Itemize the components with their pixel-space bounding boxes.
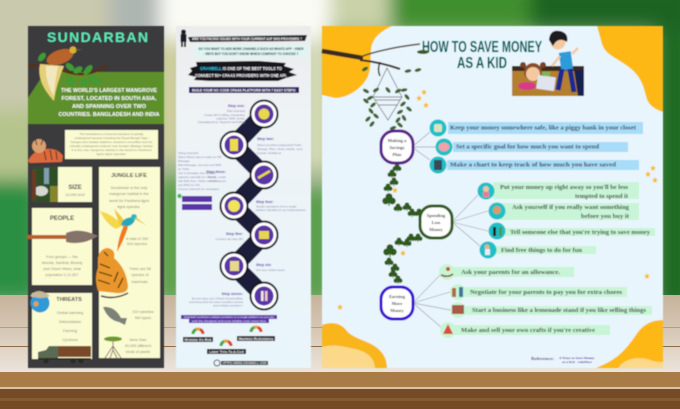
panel: people: PEOPLE <box>50 216 74 222</box>
text: channel list: Choose channels for campaigns <box>178 187 220 191</box>
panel: size <box>32 167 92 202</box>
panel: threats: Farming <box>63 329 77 333</box>
text: step six: Step six: <box>256 263 272 267</box>
branch items: earning more: Negotiate for your parents to pay you for extra chores <box>470 290 623 296</box>
branch items: spending less: tempted to spend it <box>575 194 628 200</box>
panel: jungle life: species of <box>131 273 149 277</box>
node: earning more money: More <box>392 301 402 306</box>
callout: channels question: DO YOU WANT TO ADD MORE CHANNELS SUCH AS WHATS APP - VIBER <box>198 47 304 51</box>
branch items: spending less: Ask yourself if you really want something <box>512 205 629 211</box>
reference note: 6 Ways to Save Money <box>560 356 595 360</box>
panel: jungle life <box>96 167 160 358</box>
panel: jungle life: 40,000 different <box>125 344 152 348</box>
title: how to save money as a kid <box>422 39 542 72</box>
illustration: kids with money box <box>512 31 584 96</box>
text: channel list: capacity manually for Consult <box>178 175 216 179</box>
green headline band <box>28 72 164 124</box>
node: making a savings plan: Making a <box>388 138 407 143</box>
text: step four <box>256 200 306 212</box>
node: spending less money <box>420 206 452 238</box>
panel: threats: Deforestation <box>59 320 81 324</box>
panel: Sundarban infographic <box>27 26 164 368</box>
green headline band: FOREST, LOCATED IN SOUTH ASIA, <box>62 96 157 102</box>
text: step two: Step two: <box>257 137 274 141</box>
text: channel list: and SMS for IVR <box>178 183 200 187</box>
title: how to save money as a kid: HOW TO SAVE MONEY <box>422 39 542 56</box>
text: step one: Step one: <box>228 104 245 108</box>
node: spending less money: Less <box>432 220 441 225</box>
icon: logging truck <box>38 346 91 364</box>
text: step seven: and multiple providers ! <box>213 304 243 308</box>
branch items: earning more: Start a business like a lemonade stand if you like selling things <box>472 308 647 314</box>
branch items: earning more: Make and sell your own crafts if you're creative <box>461 328 595 334</box>
icon: sitting tiger <box>96 248 128 297</box>
text: step six: Get your unified report <box>256 268 285 272</box>
text: step two: include: shoftapi.ai <box>257 151 281 155</box>
text: step three <box>206 170 226 183</box>
panel: jungle life: More than <box>129 338 147 342</box>
node: spending less money: Spending <box>427 213 446 218</box>
text: step three: flow in secon <box>209 179 226 183</box>
branch items: spending less <box>478 182 655 258</box>
green headline band: THE WORLD'S LARGEST MANGROVE <box>61 88 157 94</box>
panel: Grambell CPaaS infographic <box>176 26 311 368</box>
gauge: maximize redundancy: Maximize Redundancy <box>238 337 274 341</box>
text: step four: Simple operations from a single <box>256 204 297 208</box>
text: step six <box>256 263 285 272</box>
banner: build steps: BUILD YOUR NO CODE CPAAS PLATFORM WITH 7 EASY STEPS! <box>192 88 296 92</box>
panel: people: population 2,11,627 <box>45 273 79 277</box>
orange blob top right <box>597 26 663 112</box>
reference note: as a Kid - wikiHow <box>562 360 593 364</box>
panel: threats: THREATS <box>56 297 82 303</box>
decorative stars <box>337 89 658 310</box>
node: earning more money <box>381 287 413 319</box>
intro text box: endangered species including the Royal Bengal Tiger, <box>74 136 149 140</box>
text: step one: Campaign(sms), Segment and billing <box>198 120 245 124</box>
title: Sundarban: SUNDARBAN <box>47 29 148 45</box>
text: step one: segment, SMS, Email, <box>216 116 245 120</box>
purple summary band: pick the cheapest and most reliable route every time <box>192 319 266 323</box>
text: step seven: and bring back the same excellent service <box>189 300 243 304</box>
text: step three: Step three: <box>206 170 226 174</box>
icon: hummingbird <box>100 209 147 252</box>
panel: threats <box>30 291 92 364</box>
branch with hanging planter <box>322 44 429 131</box>
text: step five: Step five: <box>226 232 243 236</box>
footer url <box>214 360 268 366</box>
text: channel list: for Twilio <box>178 167 190 171</box>
intro text box <box>65 130 158 159</box>
node: spending less money: Money <box>429 227 443 232</box>
node: making a savings plan <box>381 131 413 163</box>
branch items: earning more <box>439 264 652 338</box>
forest image <box>32 167 58 202</box>
text: channel list: with Bulk Sms, Twitter and Viber <box>178 179 219 183</box>
gauge: minimize the risk: Minimize the Risk <box>184 338 212 342</box>
intro text box: This Sundarbans is of universal importance for globally <box>80 132 144 136</box>
green headline band: AND SPANNING OVER TWO <box>72 104 147 110</box>
panel: how to save money as a kid <box>322 26 663 368</box>
branch items: savings plan <box>430 120 643 174</box>
panel: jungle life: JUNGLE LIFE <box>111 173 147 179</box>
panel: jungle life: bird species <box>127 242 147 246</box>
banner: Grambell headline <box>188 61 297 81</box>
icon: globe <box>30 291 50 312</box>
text: step seven: Step seven: <box>222 292 243 296</box>
step circles <box>220 100 278 310</box>
text: channel list: Message <box>178 159 190 163</box>
banner: question: ARE YOU FACING ISSUES WITH YOUR CURRENT A2P SMS PROVIDERS ? <box>192 37 302 41</box>
panel: people: Four groups — the <box>46 255 78 259</box>
icon: bird of paradise on branch <box>28 46 108 101</box>
text: channel list: Select Meta's app to make an IVR <box>178 155 222 159</box>
branch items: earning more: Ask your parents for an allowance. <box>461 270 561 276</box>
text: step four: platform (Enable for our implementors) <box>256 208 306 212</box>
panel: jungle life: A total of 269 <box>126 237 148 241</box>
text: step seven <box>189 292 244 308</box>
text: step four: Step four: <box>256 200 274 204</box>
orange blob bottom left <box>322 323 387 368</box>
branch items: savings plan: Keep your money somewhere safe, like a piggy bank in your closet <box>450 126 636 132</box>
panel: jungle life: 210 varieties <box>132 310 154 314</box>
green headline band: COUNTRIES. BANGLADESH AND INDIA <box>58 112 160 118</box>
node: making a savings plan: Plan <box>393 152 402 157</box>
purple summary band <box>181 315 277 323</box>
branch items: savings plan: Set a specific goal for how much you want to spend <box>456 144 600 150</box>
text: step one: Pilot Grambell <box>227 109 245 113</box>
intro text box: tigris tigris species. <box>96 152 127 156</box>
callout: channels question: - RBTS BUT YOU DON'T KNOW WHICH COMPANY TO CHOOSE ? <box>204 52 298 56</box>
panel: size: 10,000 km2 <box>65 193 85 197</box>
node: making a savings plan: Savings <box>389 145 405 150</box>
text: step two: Select providers (supported) Twilio, <box>257 143 302 147</box>
callout: channels question <box>195 45 308 57</box>
icon: mangrove tree <box>104 336 122 358</box>
branch items: savings plan: Make a chart to keep track of how much you have saved <box>450 162 617 168</box>
title: how to save money as a kid: AS A KID <box>457 55 507 72</box>
orange blob bottom right <box>596 320 663 368</box>
icon: lying tiger <box>28 139 63 163</box>
footer url: HTTPS://WWW.GRAMBELL.COM <box>222 361 267 365</box>
text: channel list: Bulk Message: via a bot and SMS <box>178 163 221 167</box>
connector lines <box>412 132 488 328</box>
purple summary band: Grambell combines multiple providers on a single platform so you can <box>184 315 274 319</box>
gauge: maximize redundancy <box>237 327 275 341</box>
panel: threats: Cyclones <box>62 338 78 342</box>
gauge: lower time-to-cost: Lower Time-To-&-Cost <box>209 350 245 354</box>
panel: jungle life: kinds of plants <box>126 350 150 354</box>
text: step seven: Sit and enjoy your CPaaS functionalities <box>192 296 244 300</box>
icon: astronaut figure <box>180 30 186 47</box>
text: step five: Connect via easy API <box>216 237 243 241</box>
step path connector <box>234 114 264 296</box>
gauge: minimize the risk <box>183 329 213 342</box>
icon: spear brush <box>27 231 98 243</box>
node: earning more money: Money <box>390 308 404 313</box>
intro text box: Ganges and Irawadi dolphins, estuarine crocodiles and the <box>70 140 153 144</box>
panel: jungle life: world for Panthera tigris <box>109 199 149 203</box>
panel: size: SIZE <box>68 185 82 191</box>
text: step five <box>216 232 243 241</box>
reference note: Reference: <box>531 356 555 361</box>
text: channel list <box>178 151 222 191</box>
text: step one: Create API in billing, transaction <box>204 113 245 117</box>
text: step two <box>257 137 303 155</box>
text: step one <box>198 104 245 124</box>
panel: threats: Global warming <box>57 311 83 315</box>
text: channel list: Sizing channels: <box>178 151 199 155</box>
banner: question <box>188 35 307 42</box>
panel: jungle life: mangrove habitat in the <box>109 192 149 196</box>
text: step three: Ready, create <box>208 175 226 179</box>
text: channel list: Use a campaign and conduct <box>178 171 216 175</box>
branch items: spending less: Find free things to do for fun <box>501 248 583 254</box>
icon: fish <box>103 307 127 325</box>
banner: build steps <box>189 87 299 93</box>
branch items: spending less: before you buy it <box>581 214 629 220</box>
clover vine <box>382 164 424 284</box>
orange blob top left <box>322 26 392 98</box>
node: earning more money: Earning <box>389 294 406 299</box>
reference note <box>531 356 595 364</box>
branch items: spending less: Put your money up right away so you'll be less <box>500 185 629 191</box>
panel: people <box>27 208 98 285</box>
intro text box: It is the only mangrove habitat in the world for Panthera <box>72 148 152 152</box>
panel: jungle life: mammals. <box>131 280 149 284</box>
branch items: spending less: Tell someone else that you're trying to save money <box>510 230 650 236</box>
intro text box: critically endangered endemic river terrapin (Batagur baska). <box>70 144 154 148</box>
panel: jungle life: There are 58 <box>129 267 151 271</box>
text: step two: Telesign, Plivo, Vonie, Infobip, more <box>257 147 303 151</box>
panel: jungle life: Sunderban is the only <box>111 186 147 190</box>
banner: Grambell headline: GRAMBELL IS ONE OF THE BEST TOOLS TO <box>200 66 282 72</box>
panel: jungle life: tigris species. <box>117 205 141 209</box>
whatsapp pills <box>177 194 212 210</box>
panel: jungle life: fish types <box>135 316 151 320</box>
banner: Grambell headline: CONNECT 50+ CPAAS PROVIDERS WITH ONE API. <box>195 73 287 79</box>
gauge: lower time-to-cost <box>207 341 246 354</box>
panel: people: and Oraon tribes, total <box>43 267 81 271</box>
panel: people: Munda, Santhal, Bhumij <box>42 261 82 265</box>
